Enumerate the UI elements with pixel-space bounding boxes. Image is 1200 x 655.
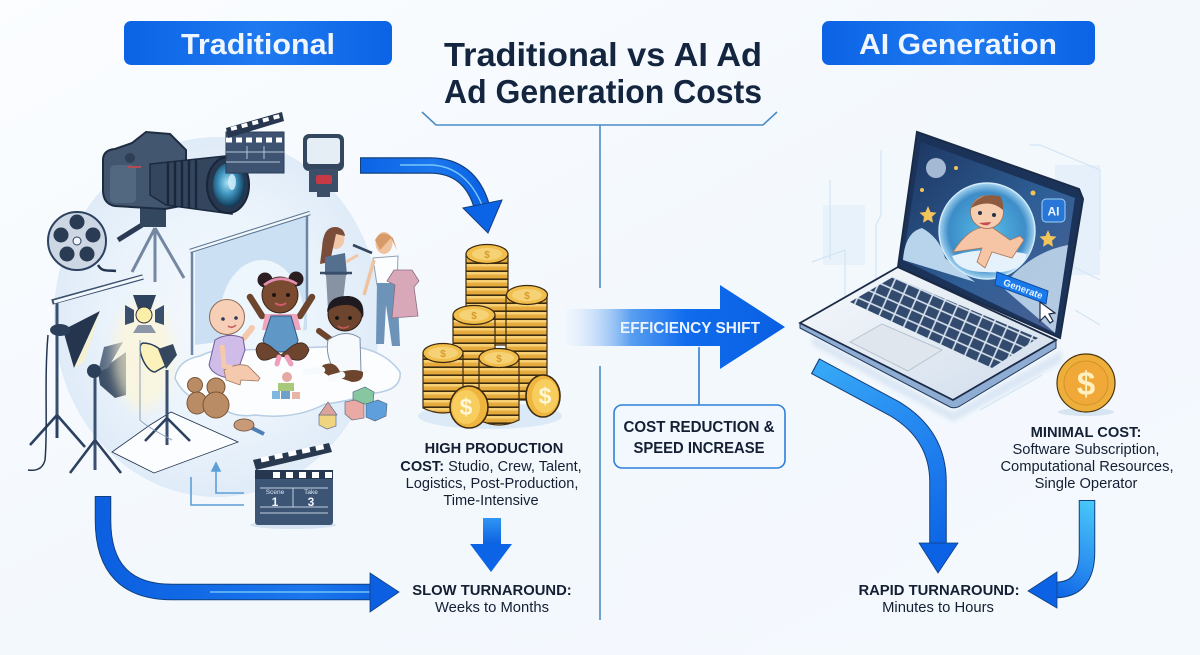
callout: cost reduction and speed increase: SPEED INCREASE	[634, 440, 764, 457]
coin: leaning left: $	[460, 394, 473, 420]
arrow: camera to coins	[360, 165, 502, 233]
fluffy cloud rug	[175, 346, 400, 416]
screen: bubble with baby	[939, 183, 1035, 279]
text: minimal cost	[1000, 425, 1174, 492]
baby in overalls	[250, 272, 312, 364]
icon: film reel	[48, 212, 116, 271]
faint tech background	[812, 145, 1100, 410]
adult crew	[320, 227, 419, 346]
heading: AI Generation	[822, 21, 1095, 65]
round lamp	[140, 340, 190, 445]
coin stack: right	[506, 286, 548, 400]
makeup brush	[234, 419, 264, 434]
toy blocks on floor	[319, 387, 387, 429]
coin stack: middle	[453, 306, 495, 395]
center divider and title bracket	[422, 112, 777, 620]
arrow: cost to slow turnaround	[470, 518, 512, 572]
cursor	[1040, 302, 1055, 323]
coin stack: tall back: $	[484, 250, 490, 261]
icon: tripod	[118, 207, 184, 282]
text: slow turnaround: SLOW TURNAROUND:	[412, 583, 572, 599]
icon: clapperboard top	[226, 112, 284, 173]
text: minimal cost: Software Subscription,	[1013, 442, 1159, 458]
text: high production cost	[400, 441, 582, 509]
heading: Traditional: Traditional	[181, 29, 335, 61]
arrow: laptop to rapid turnaround	[815, 366, 958, 573]
laptop base	[800, 323, 1056, 408]
connector: shift to callout	[698, 347, 700, 405]
icon: clapperboard bottom: Scene	[266, 489, 285, 496]
text: rapid turnaround: Minutes to Hours	[882, 600, 994, 616]
coin stack: right: $	[524, 291, 530, 302]
icon: laptop with AI generation	[800, 132, 1083, 422]
coin stack: front left: $	[440, 349, 446, 360]
icon: coin stacks	[418, 244, 562, 429]
text: high production cost: HIGH PRODUCTION	[425, 441, 563, 457]
text: rapid turnaround: RAPID TURNAROUND:	[858, 583, 1020, 599]
text: minimal cost: MINIMAL COST:	[1031, 425, 1141, 441]
teddy bears	[187, 378, 229, 418]
text: high production cost: Logistics, Post-Production,	[406, 476, 578, 492]
title	[444, 36, 762, 110]
panel: traditional studio illustration	[28, 112, 419, 529]
icon: clapperboard bottom: Take	[304, 489, 318, 496]
laptop screen	[903, 142, 1075, 333]
icon: clapperboard bottom	[250, 443, 336, 529]
text: rapid turnaround	[858, 583, 1020, 616]
coin stack: middle: $	[471, 311, 477, 322]
barn-door light	[70, 342, 126, 473]
coin stack: tall back	[466, 244, 508, 345]
softbox light	[28, 277, 143, 470]
laptop lid	[898, 132, 1083, 338]
screen: moon and stars	[903, 158, 1068, 333]
heading: Traditional	[124, 21, 392, 65]
studio backdrop circle	[54, 137, 380, 497]
coin: leaning right: $	[539, 383, 552, 409]
text: minimal cost: Single Operator	[1035, 476, 1138, 492]
icon: clapperboard bottom: 3	[308, 495, 315, 509]
callout: cost reduction and speed increase: COST REDUCTION &	[624, 419, 774, 436]
heading: AI Generation: AI Generation	[859, 29, 1057, 61]
spot light	[113, 295, 173, 410]
coin stack: front left	[423, 344, 463, 413]
AI chip badge	[1042, 199, 1065, 222]
title: Ad Generation Costs	[444, 73, 762, 110]
icon: camera	[103, 132, 249, 214]
arrow: efficiency shift: EFFICIENCY SHIFT	[620, 320, 761, 337]
Generate button: Generate	[1002, 277, 1044, 302]
toy blocks on rug	[272, 372, 300, 399]
AI chip badge: AI	[1048, 204, 1060, 218]
arrow: efficiency shift	[565, 285, 785, 369]
text: slow turnaround	[412, 583, 572, 616]
icon: camera flash	[303, 134, 344, 197]
Generate button	[995, 272, 1048, 304]
icon: dollar coin	[1057, 354, 1115, 416]
light blue angle arrows	[191, 463, 244, 505]
coin stack: front right	[479, 348, 519, 425]
coin: leaning right	[526, 375, 560, 417]
baby in white onesie	[306, 296, 363, 382]
keyboard	[850, 277, 1038, 368]
text: slow turnaround: Weeks to Months	[435, 600, 549, 616]
coin: leaning left	[450, 386, 488, 428]
floor paper	[112, 412, 238, 473]
text: minimal cost: Computational Resources,	[1000, 459, 1174, 475]
arrow: studio to slow turnaround	[103, 496, 399, 612]
text: high production cost: COST: Studio, Crew, Talent,	[400, 459, 582, 475]
icon: dollar coin: $	[1077, 365, 1095, 402]
touchpad	[850, 324, 942, 371]
backdrop frame	[190, 213, 310, 376]
arrow: minimal cost to rapid turnaround	[1028, 500, 1087, 608]
callout: cost reduction and speed increase	[614, 405, 785, 468]
coin stack: front right: $	[496, 354, 502, 365]
baby in purple onesie	[209, 300, 260, 385]
title: Traditional vs AI Ad	[444, 36, 762, 73]
icon: clapperboard bottom: 1	[272, 495, 279, 509]
text: high production cost: Time-Intensive	[443, 493, 539, 509]
laptop shadow	[812, 335, 1062, 422]
